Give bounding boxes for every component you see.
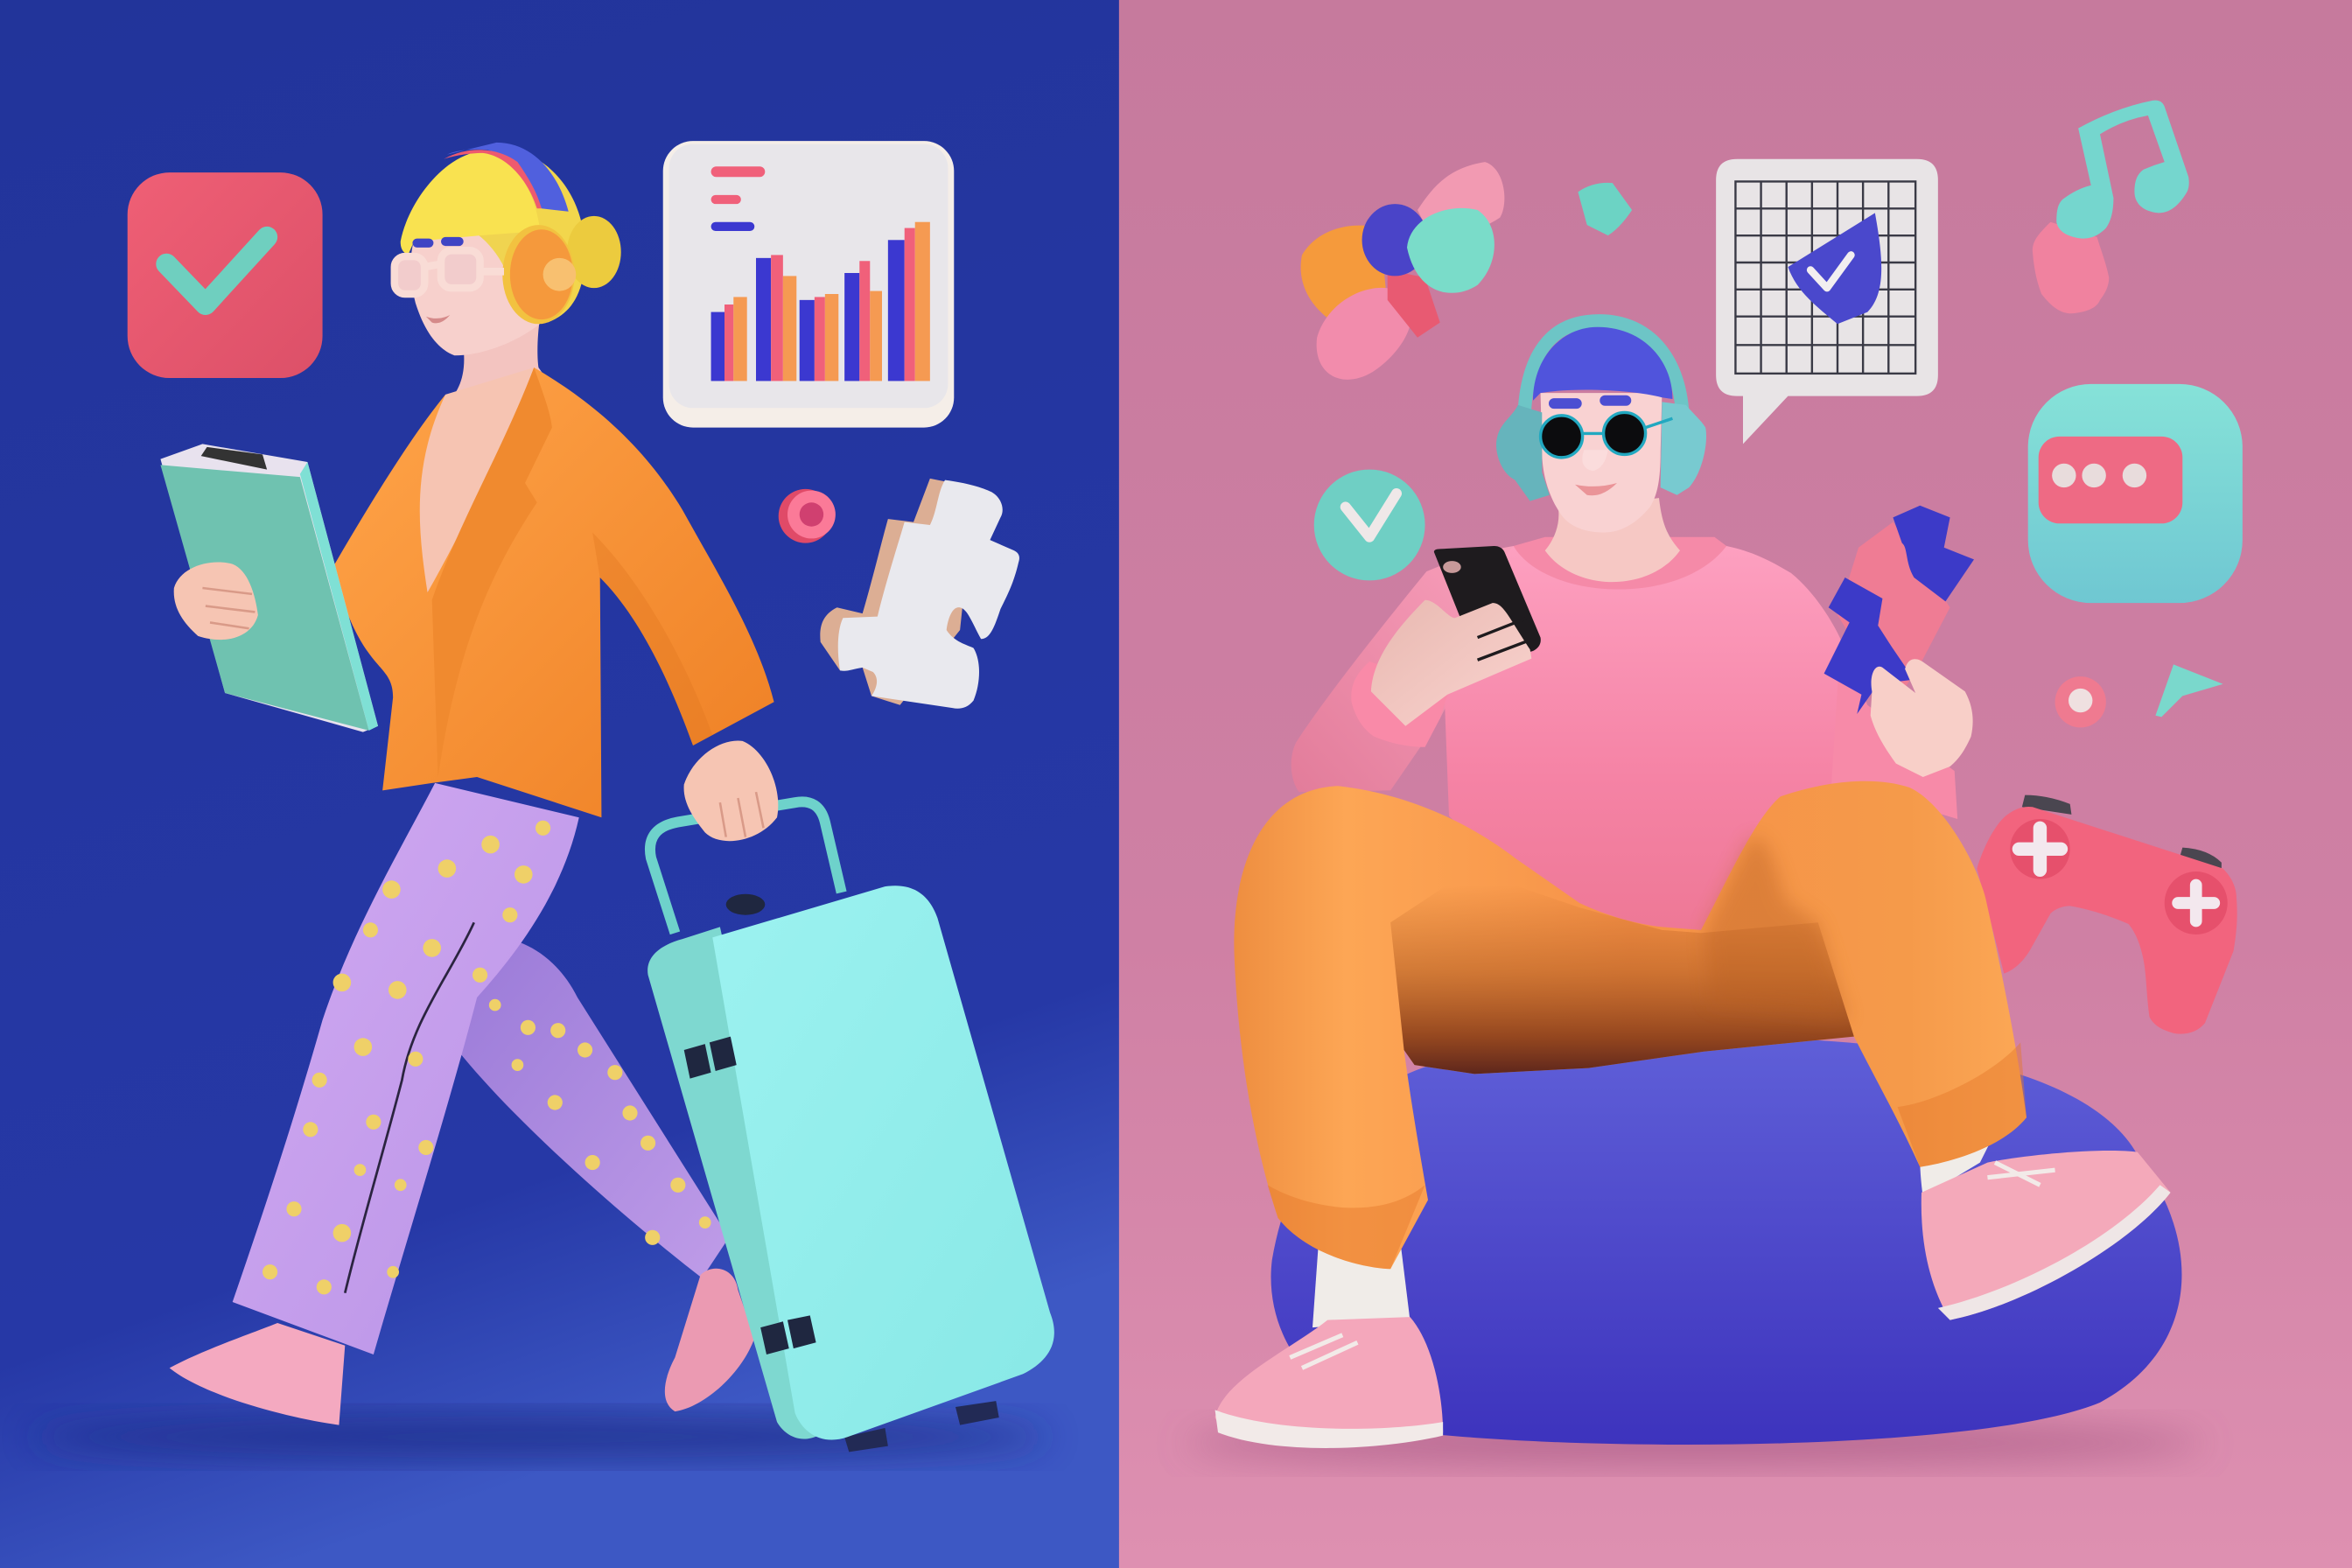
chart card [663, 141, 954, 428]
front leg [233, 783, 579, 1354]
neck [445, 318, 556, 495]
sunglasses [1541, 412, 1672, 458]
icon: flag [2155, 664, 2223, 717]
icon: teal gem [1578, 183, 1632, 235]
legs [1234, 781, 2026, 1269]
pants dots [262, 821, 711, 1294]
icon: pink ring [779, 489, 836, 543]
front shoe [170, 1323, 345, 1425]
jacket sleeve shade [592, 533, 712, 746]
latches [684, 1037, 816, 1354]
collar [1514, 537, 1726, 590]
icon: puzzle piece [820, 479, 1019, 709]
floor shadow [30, 1416, 1050, 1458]
right thigh inner shade [1704, 837, 1848, 1020]
back leg [458, 937, 729, 1278]
chat button [2028, 384, 2243, 603]
torso [1445, 546, 1840, 930]
side hair [477, 228, 537, 277]
right cuff shade [1898, 1042, 2026, 1167]
phone [1434, 546, 1541, 663]
icon: game controller [1977, 795, 2237, 1034]
cuff [1351, 662, 1447, 747]
jacket [333, 368, 774, 817]
right shoe [1922, 1151, 2171, 1320]
background: left blue panel [0, 0, 1119, 1568]
far sleeve [1791, 578, 1957, 819]
lips [1575, 483, 1617, 495]
suitcase [648, 802, 1054, 1452]
pants crease [345, 922, 474, 1293]
lips [426, 315, 450, 323]
brows [417, 242, 459, 243]
background: right pink panel [1119, 0, 2352, 1568]
hand with phone [1371, 546, 1541, 726]
bun [567, 216, 621, 288]
hair dome [401, 151, 540, 255]
face [410, 225, 543, 355]
beanie [1533, 327, 1672, 401]
sweater [1292, 537, 1957, 930]
icon: check circle [1314, 470, 1425, 580]
nose [1582, 450, 1608, 471]
left sock [1312, 1222, 1410, 1327]
head [1496, 321, 1706, 533]
back shoe [665, 1269, 754, 1411]
speech bubble with grid [1716, 159, 1938, 444]
left cuff shade [1268, 1185, 1425, 1269]
floor shadow [1185, 1422, 2205, 1464]
right hand on handle [684, 741, 778, 841]
suitcase handle [650, 802, 842, 933]
earcup [502, 225, 575, 324]
right sock [1920, 1084, 2003, 1197]
neck [1545, 498, 1680, 582]
lapel [432, 368, 552, 777]
left shoe [1215, 1317, 1443, 1448]
head [395, 143, 621, 355]
bean bag [1271, 1037, 2181, 1445]
puzzle in hand [1824, 506, 1974, 714]
headband [447, 143, 569, 212]
back of head [510, 150, 585, 323]
icon: blue shield check [1788, 213, 1881, 324]
wheels [844, 1401, 999, 1452]
panel: gamer [1185, 101, 2243, 1464]
icon: check tile [128, 172, 323, 378]
hand with puzzle [1871, 659, 1973, 777]
brows [1554, 401, 1626, 403]
side shell [648, 927, 832, 1439]
right earcup [1661, 402, 1706, 495]
inner shading [1390, 870, 1854, 1074]
near sleeve [1292, 546, 1514, 792]
clipboard [160, 444, 378, 732]
glasses [395, 250, 504, 294]
trousers silhouette [1234, 781, 2026, 1269]
chest [420, 368, 534, 592]
bar chart [711, 222, 930, 381]
face [1541, 393, 1662, 533]
icon: small ring [2055, 676, 2106, 727]
left hand [174, 562, 258, 640]
headphone band [1524, 321, 1683, 428]
left earcup [1496, 405, 1550, 501]
blob cluster [1301, 162, 1504, 380]
icon: music note [2056, 101, 2189, 239]
panel: traveller [30, 141, 1054, 1458]
icon: pink blob [2033, 222, 2109, 313]
front shell [712, 886, 1054, 1440]
